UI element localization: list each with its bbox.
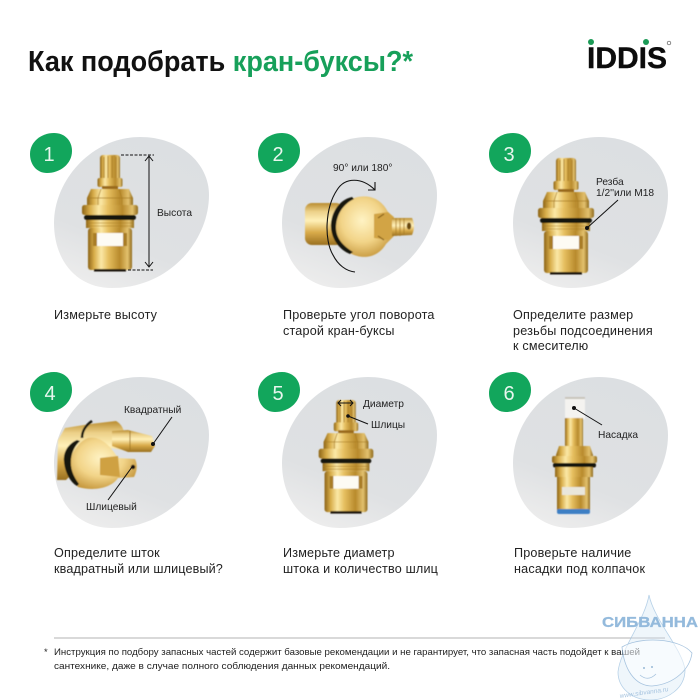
caption 1: Измерьте высоту (54, 308, 158, 322)
blob backdrop 1 (54, 137, 209, 288)
cartridge photo 3 (538, 158, 594, 274)
caption 3: Определите размер (513, 308, 633, 322)
label angle: 90° или 180° (333, 163, 392, 174)
footnote: * (44, 646, 48, 657)
label thread: 1/2''или M18 (596, 188, 654, 199)
nozzle pointer (572, 406, 602, 425)
label thread: Резба (596, 176, 624, 188)
caption 2: старой кран-буксы (283, 324, 395, 338)
height arrow (121, 155, 154, 270)
pointer square stem (151, 417, 172, 446)
caption 3: к смесителю (513, 339, 588, 353)
cartridge photo 6 (552, 397, 597, 514)
cartridge photo 4 (57, 421, 155, 489)
watermark: Sibvanna drop (602, 595, 699, 700)
pointer splined stem (108, 467, 132, 500)
badge 2 (258, 133, 300, 173)
caption 4: Определите шток (54, 546, 160, 560)
badge 6 (489, 372, 531, 412)
panel: step 6 nozzle (489, 372, 668, 576)
caption 2: Проверьте угол поворота (283, 308, 435, 322)
panel: step 5 diameter (258, 372, 438, 576)
panel: step 1 height (30, 133, 209, 322)
badge 6: 6 (503, 383, 515, 405)
diameter arrow (338, 400, 353, 406)
badge 3 (489, 133, 531, 173)
badge 5 (258, 372, 300, 412)
label splines: Шлицы (371, 420, 405, 431)
splines pointer (346, 414, 368, 424)
label diameter: Диаметр (363, 399, 404, 410)
footnote: Инструкция по подбору запасных частей содержит базовые рекомендации и не гарантирует, что запасная часть подойдет к вашей (54, 646, 640, 657)
badge 3: 3 (503, 144, 515, 166)
thread pointer (585, 200, 618, 230)
caption 6: насадки под колпачок (514, 562, 645, 576)
logo: IDDIS: IDDIS (587, 42, 667, 75)
label square: Квадратный (124, 405, 181, 416)
cartridge photo 5 (319, 400, 373, 514)
badge 4: 4 (44, 383, 56, 405)
cartridge photo 1 (82, 155, 138, 272)
watermark: Sibvanna drop: СИБВАННА (602, 615, 699, 631)
cartridge photo 2 (305, 196, 414, 257)
badge 4 (30, 372, 72, 412)
badge 5: 5 (272, 383, 284, 405)
label height: Высота (157, 208, 192, 219)
panel: step 2 rotation angle (258, 133, 437, 338)
caption 6: Проверьте наличие (514, 546, 632, 560)
rotation arrow (327, 180, 375, 272)
panel: step 3 thread size (489, 133, 668, 353)
label splined: Шлицевый (86, 502, 137, 513)
badge 1: 1 (43, 144, 55, 166)
blob backdrop 2 (282, 137, 437, 288)
caption 5: штока и количество шлиц (283, 562, 438, 576)
panel: step 4 stem type (30, 372, 223, 576)
label nozzle: Насадка (598, 430, 638, 441)
blob backdrop 4 (54, 377, 209, 528)
divider line (54, 637, 665, 639)
blob backdrop 3 (513, 137, 668, 288)
caption 5: Измерьте диаметр (283, 546, 395, 560)
footnote: сантехнике, даже в случае полного соблюдения данных рекомендаций. (54, 660, 390, 671)
badge 2: 2 (272, 144, 284, 166)
title: Как подобрать кран-буксы?* (28, 46, 414, 78)
blob backdrop 5 (282, 377, 437, 528)
watermark: Sibvanna drop: www.sibvanna.ru (619, 686, 669, 700)
caption 3: резьбы подсоединения (513, 324, 653, 338)
badge 1 (30, 133, 72, 173)
caption 4: квадратный или шлицевый? (54, 562, 223, 576)
blob backdrop 6 (513, 377, 668, 528)
